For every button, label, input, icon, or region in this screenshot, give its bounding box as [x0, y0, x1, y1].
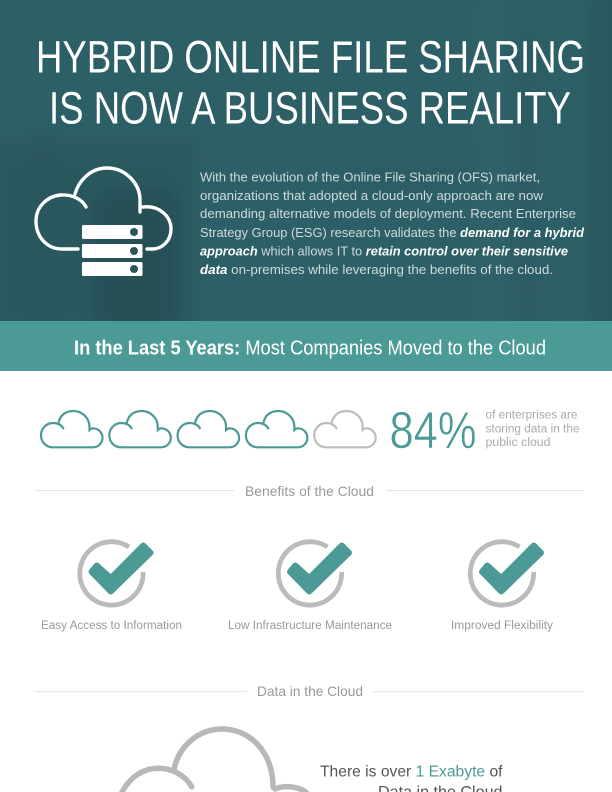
text block: introduction: With the evolution of the Online File Sharing (OFS) market, — [200, 170, 540, 184]
panel: teal banner — [0, 321, 612, 371]
text block: introduction: Strategy Group (ESG) research validates the demand for a hybrid — [200, 225, 585, 240]
icon: large gray cloud — [121, 729, 307, 792]
text block: statistic caption: storing data in the — [486, 424, 580, 436]
icon row: five clouds — [41, 411, 376, 447]
benefit: low maintenance: Low Infrastructure Maintenance — [228, 620, 392, 632]
heading: data in the cloud: Data in the Cloud — [257, 683, 363, 699]
text block: data in the cloud — [320, 764, 503, 792]
heading: benefits of the cloud: Benefits of the Cloud — [245, 483, 374, 499]
title — [36, 31, 585, 133]
benefit: improved flexibility — [451, 542, 553, 632]
text block: introduction: data on-premises while leveraging the benefits of the cloud. — [200, 262, 553, 277]
text block: statistic caption: of enterprises are — [486, 410, 578, 422]
statistic: 84%: 84% — [390, 402, 476, 460]
text block: statistic caption — [486, 410, 580, 449]
benefit: low maintenance — [228, 542, 392, 632]
icon: cloud with server stack — [36, 168, 171, 276]
heading: banner: In the Last 5 Years: Most Companies Moved to the Cloud — [74, 338, 546, 360]
text block: introduction — [200, 170, 585, 277]
text block: data in the cloud: There is over 1 Exabyte of — [320, 764, 503, 781]
text block: introduction: organizations that adopted a cloud-only approach are now — [200, 188, 543, 203]
benefit: easy access: Easy Access to Information — [41, 620, 182, 632]
benefit: improved flexibility: Improved Flexibility — [451, 620, 553, 632]
text block: statistic caption: public cloud — [486, 437, 550, 449]
panel: hero background — [0, 0, 612, 340]
text block: introduction: approach which allows IT to retain control over their sensitive — [200, 244, 568, 258]
benefit: easy access — [41, 542, 182, 632]
text block: introduction: demanding alternative models of deployment. Recent Enterprise — [200, 206, 576, 221]
